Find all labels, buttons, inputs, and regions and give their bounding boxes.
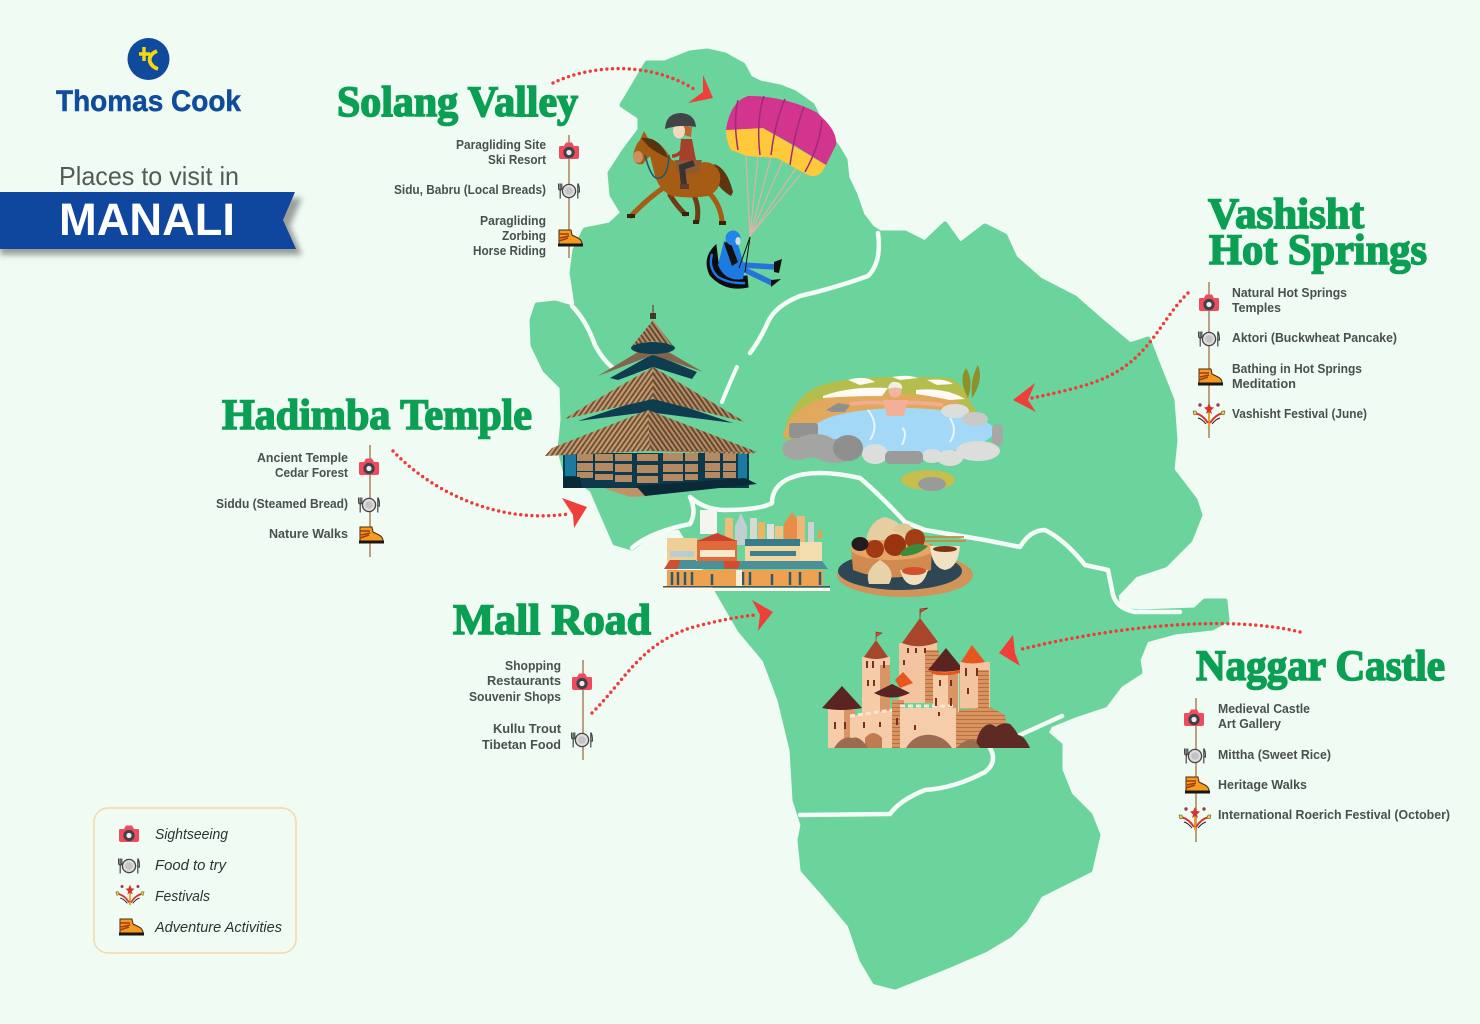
icon: camera — [1199, 294, 1219, 311]
bather hair — [888, 382, 902, 389]
battlements — [850, 706, 956, 716]
icon: plate — [359, 498, 379, 512]
dark plate — [838, 552, 962, 590]
middle roof right — [653, 367, 745, 422]
far right tower — [960, 662, 990, 708]
saddle — [675, 160, 702, 174]
canopy magenta — [726, 96, 836, 165]
panel: Vashisht Hot Springs details — [1193, 282, 1397, 438]
icon: festival — [1179, 807, 1211, 830]
horse mane — [641, 138, 668, 158]
ribbon banner: MANALI — [0, 192, 302, 255]
reeds — [962, 365, 980, 398]
middle dark band — [578, 396, 733, 423]
icon: food to try — [119, 858, 139, 874]
center building — [697, 540, 737, 566]
central roof — [902, 618, 938, 646]
details text: Meditation — [1232, 377, 1296, 391]
river: central channel — [722, 367, 737, 402]
wall blue ends — [565, 453, 747, 480]
right building — [745, 545, 801, 564]
icon: plate — [559, 184, 579, 198]
right windows — [750, 551, 796, 556]
bather torso — [883, 400, 908, 416]
pool — [812, 408, 994, 454]
icon: adventure activities — [119, 919, 144, 936]
tea cup — [930, 546, 960, 570]
white church — [700, 510, 717, 534]
center windows — [700, 550, 735, 557]
details text: Paragliding — [480, 214, 546, 228]
mound — [901, 470, 955, 490]
central tower — [899, 643, 937, 703]
details text: Paragliding Site — [456, 138, 546, 152]
pavement line — [663, 586, 830, 588]
logo wordmark: Thomas Cook — [56, 85, 241, 118]
river: north channel — [750, 233, 879, 353]
timeline rule — [582, 660, 584, 760]
brick column — [892, 700, 904, 748]
illustration: momo platter — [837, 517, 973, 597]
illustration: Hadimba temple — [545, 305, 757, 497]
pilot legs — [742, 265, 775, 283]
legend label: adventure activities: Adventure Activities — [154, 919, 282, 936]
river: western channel — [572, 306, 612, 367]
arrow: Naggar Castle — [999, 624, 1300, 666]
left roof — [864, 640, 888, 659]
dark bushes — [975, 723, 1030, 748]
right roof rim — [930, 669, 962, 675]
details text: Shopping — [505, 659, 561, 673]
panel: Hadimba Temple details — [216, 445, 384, 557]
brown bushes — [834, 735, 980, 748]
logo mark — [128, 38, 170, 80]
details text — [1218, 702, 1450, 822]
timeline rule — [1195, 698, 1197, 842]
icon: boot — [1198, 369, 1223, 386]
meatballs — [866, 540, 884, 558]
floor shadow — [563, 477, 757, 496]
arrow: Mall Road — [592, 600, 773, 713]
brick base right — [950, 707, 1010, 748]
panel: Solang Valley details — [394, 135, 583, 258]
far left tower — [828, 708, 855, 748]
far right shade — [978, 670, 989, 708]
lower roof right — [648, 410, 757, 452]
cone band — [631, 342, 675, 354]
central tower shade — [925, 650, 939, 703]
arrow: Vashisht Hot Springs — [1013, 293, 1188, 412]
panel: Naggar Castle details — [1179, 698, 1450, 842]
icon: camera — [559, 142, 579, 159]
lower roof — [545, 410, 757, 456]
timeline rule — [369, 445, 371, 557]
details text — [1232, 286, 1397, 421]
details text: Tibetan Food — [482, 738, 561, 752]
heading: Vashisht Hot Springs: Vashisht — [1208, 191, 1365, 238]
panel: Mall Road details — [469, 659, 592, 760]
front wall center — [900, 708, 956, 748]
steamer — [851, 543, 932, 578]
details text: Bathing in Hot Springs — [1232, 362, 1362, 376]
legend label: food to try: Food to try — [155, 857, 227, 874]
dumpling front — [868, 560, 892, 584]
wall panels — [577, 453, 736, 483]
horse far legs — [670, 192, 698, 221]
dumpling top right — [892, 523, 915, 538]
horse hooves — [627, 212, 726, 225]
rocks right — [922, 404, 1003, 466]
illustration: Naggar castle — [822, 608, 1030, 748]
rider helmet — [665, 113, 696, 129]
heading: Vashisht Hot Springs — [1208, 191, 1427, 274]
pilot visor — [735, 237, 741, 245]
rocks rear — [826, 403, 850, 412]
details text: Vashisht Festival (June) — [1232, 407, 1367, 421]
logo: Thomas Cook — [56, 38, 241, 118]
finial cap — [650, 313, 656, 319]
reins — [645, 155, 669, 178]
pilot jacket — [724, 241, 738, 266]
timeline rule — [1208, 282, 1210, 438]
details text: Souvenir Shops — [469, 690, 561, 704]
finial — [652, 305, 654, 318]
tea — [933, 546, 957, 552]
gate arch — [865, 733, 882, 748]
left windows — [670, 551, 694, 557]
middle roof — [565, 367, 745, 422]
arrow: Hadimba Temple — [393, 451, 587, 528]
upper roof — [598, 343, 703, 376]
icon: camera — [1184, 710, 1204, 726]
wall — [563, 453, 749, 488]
left building — [667, 538, 697, 564]
details text: Natural Hot Springs — [1232, 286, 1347, 300]
rider face — [673, 124, 685, 138]
icon: festivals — [116, 885, 144, 905]
icon: festival — [1193, 403, 1225, 426]
front wall left — [850, 710, 892, 748]
timeline rule — [568, 135, 570, 258]
rider arm — [672, 146, 685, 156]
details text: Nature Walks — [269, 527, 348, 541]
horse body — [633, 131, 720, 198]
shop divider — [736, 570, 742, 586]
icon: boot — [558, 230, 583, 246]
right tower shade — [948, 672, 958, 712]
illustration: horse rider — [627, 113, 733, 225]
water ripples — [868, 410, 954, 445]
canopy yellow — [726, 128, 826, 176]
details text: Aktori (Buckwheat Pancake) — [1232, 331, 1397, 345]
icon: plate — [1199, 332, 1219, 346]
windows — [835, 648, 977, 730]
harness seat — [707, 245, 748, 288]
details text: Cedar Forest — [275, 466, 349, 480]
horse muzzle — [633, 151, 643, 163]
rider boot — [680, 184, 689, 189]
details text — [394, 138, 547, 258]
details text — [216, 451, 349, 541]
details text: Zorbing — [502, 229, 546, 243]
sauce — [902, 567, 926, 575]
snow patches — [823, 376, 965, 400]
icon: plate — [1185, 748, 1205, 764]
harness blue stripe — [711, 254, 745, 283]
orange roof accent — [895, 672, 913, 688]
details text: Heritage Walks — [1218, 778, 1307, 792]
central flag — [920, 608, 928, 618]
top cone — [632, 320, 673, 346]
dumpling top — [866, 517, 907, 540]
ribbon shadow — [0, 198, 302, 255]
map landmass — [532, 51, 1227, 987]
details text: Temples — [1232, 301, 1281, 315]
mid roof — [874, 684, 910, 698]
rocks front — [862, 444, 888, 464]
icon: plate — [572, 732, 592, 748]
legend — [94, 808, 296, 953]
olive bank — [783, 377, 990, 450]
legend label: sightseeing: Sightseeing — [155, 826, 229, 843]
center roof — [697, 533, 737, 541]
steamer rim — [851, 538, 933, 560]
details text: Sidu, Babru (Local Breads) — [394, 183, 546, 197]
right teal roof — [745, 539, 800, 546]
heading: Solang Valley: Solang Valley — [337, 79, 578, 126]
rider torso — [679, 139, 696, 161]
icon: boot — [359, 527, 384, 544]
greens — [900, 544, 928, 556]
icon: camera — [359, 458, 379, 475]
legend label: festivals: Festivals — [155, 888, 210, 905]
arrow: Solang Valley — [553, 69, 713, 103]
details text: Ski Resort — [488, 153, 547, 167]
illustration: market street — [663, 510, 830, 591]
illustration: hot spring — [782, 365, 1003, 491]
details text: Ancient Temple — [257, 451, 348, 465]
dark sauce — [852, 537, 868, 551]
white strip — [663, 588, 830, 591]
chopsticks — [925, 537, 966, 541]
right tower — [933, 668, 959, 712]
pilot shoes — [771, 259, 782, 287]
rider hair — [682, 125, 692, 137]
horse tail — [714, 164, 733, 196]
icon: boot — [1185, 777, 1210, 794]
right roof — [928, 648, 963, 672]
skyline towers — [725, 512, 823, 545]
icon: sightseeing — [119, 826, 139, 842]
bather arms — [850, 402, 943, 405]
upper dark band — [610, 354, 697, 380]
details text: Restaurants — [487, 674, 561, 688]
map of Manali — [532, 51, 1227, 987]
illustration: paraglider — [707, 96, 836, 288]
risers — [739, 237, 750, 272]
mound rock — [918, 477, 946, 491]
bather head — [888, 384, 902, 398]
icon: camera — [572, 674, 592, 690]
heading: Vashisht Hot Springs: Hot Springs — [1209, 227, 1427, 274]
left tower — [862, 657, 890, 715]
ribbon shape — [0, 192, 296, 249]
details text: Horse Riding — [473, 244, 546, 258]
details text: Siddu (Steamed Bread) — [216, 497, 348, 511]
shopper crowd — [672, 572, 820, 585]
details text: Art Gallery — [1218, 717, 1281, 731]
heading: Naggar Castle: Naggar Castle — [1196, 643, 1445, 690]
wooden tray — [837, 553, 973, 597]
subtitle: Places to visit in — [59, 161, 239, 191]
base plinth — [580, 475, 648, 497]
far left roof — [822, 686, 862, 710]
sandy shore — [783, 394, 985, 440]
heading: Mall Road: Mall Road — [453, 597, 651, 644]
legend box — [94, 808, 296, 953]
main title: MANALI — [59, 194, 235, 245]
details text: International Roerich Festival (October) — [1218, 808, 1450, 822]
far right building — [800, 542, 822, 565]
details text: Kullu Trout — [493, 722, 562, 736]
far left shade — [844, 710, 855, 748]
front grey rock — [885, 451, 923, 464]
details text — [469, 659, 562, 752]
rider leg — [682, 163, 694, 186]
far right roof — [961, 645, 985, 664]
canopy seams — [736, 96, 822, 172]
pilot torso — [718, 241, 745, 279]
river: southern channel — [800, 716, 1062, 815]
details text: Mittha (Sweet Rice) — [1218, 748, 1331, 762]
suspension lines — [746, 156, 801, 236]
flag left — [876, 632, 882, 640]
red awning — [664, 560, 741, 569]
details text: Medieval Castle — [1218, 702, 1310, 716]
horse near legs — [631, 186, 722, 221]
left tower shade — [880, 665, 890, 715]
heading: Hadimba Temple: Hadimba Temple — [222, 392, 532, 439]
shop fronts — [667, 570, 823, 586]
pilot helmet — [726, 230, 740, 246]
river: main valley — [632, 473, 1180, 612]
sauce bowl — [900, 570, 928, 585]
awnings — [664, 560, 828, 569]
rocks left — [782, 423, 863, 463]
